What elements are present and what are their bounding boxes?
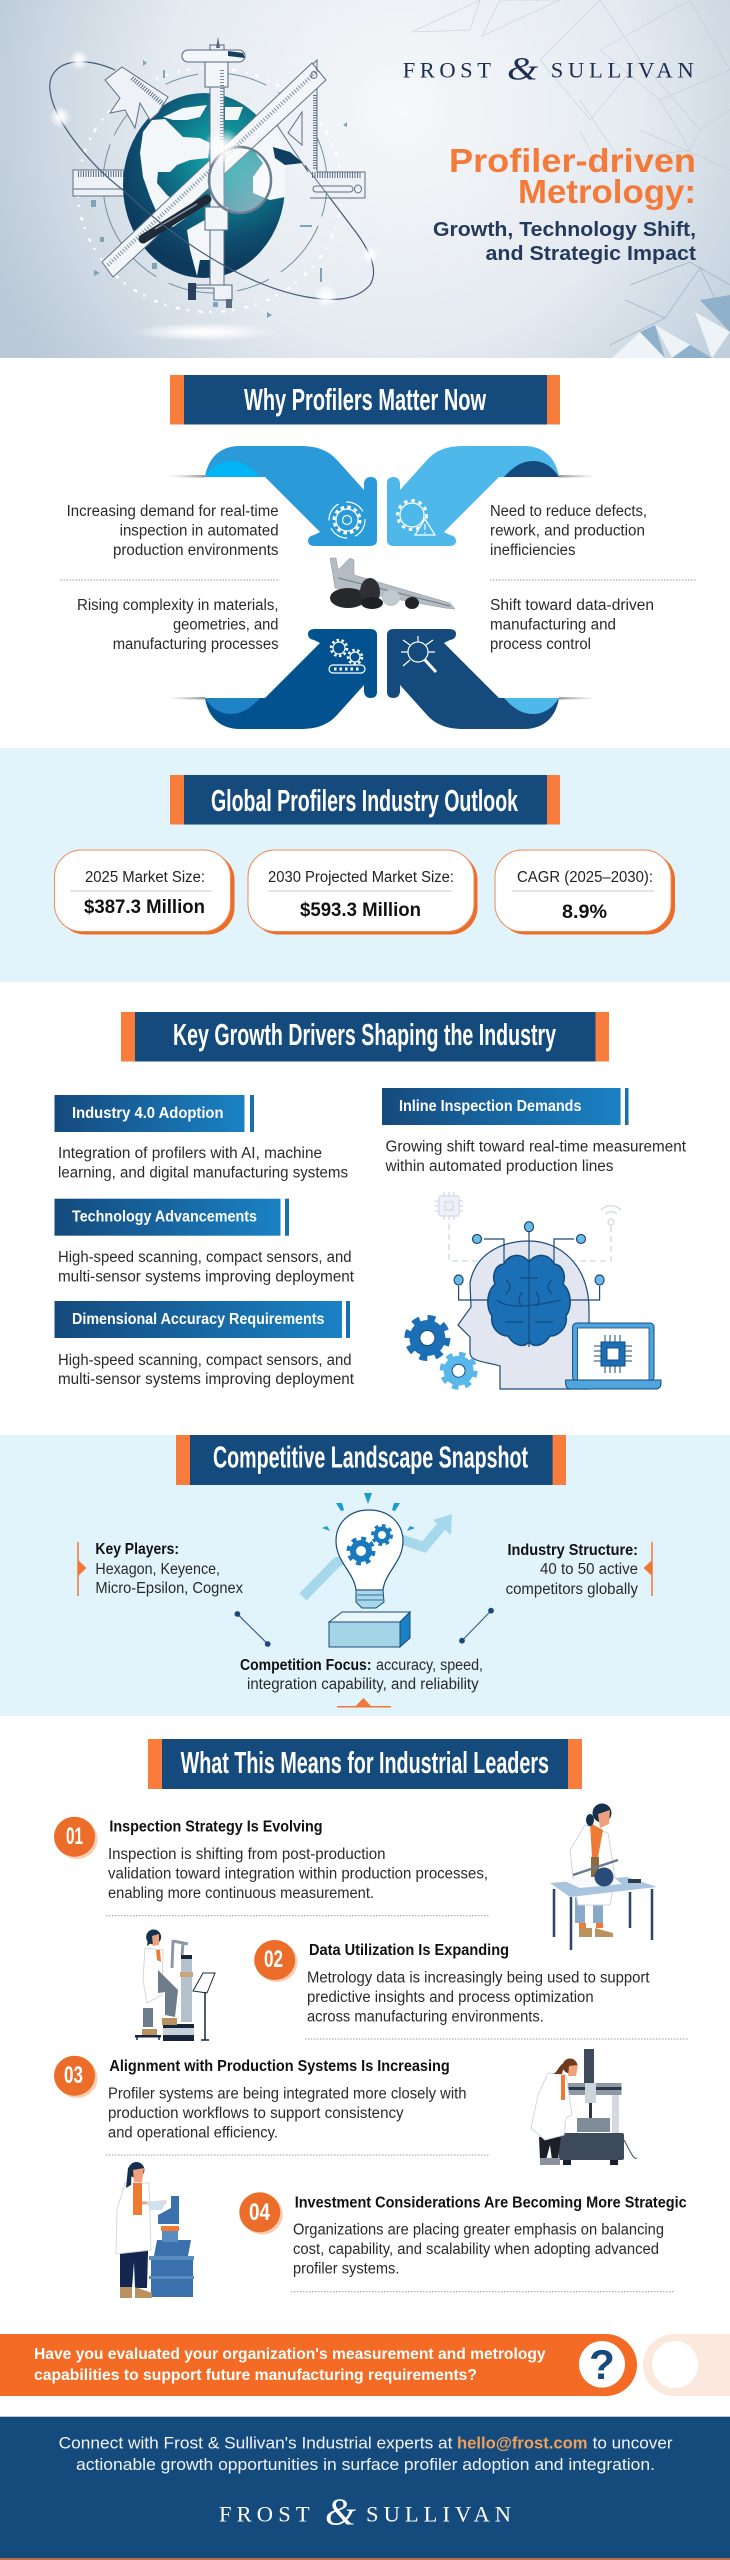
driver: industry 4.0 adoption: Industry 4.0 Adoption (72, 1105, 224, 1122)
callout: key players (78, 1541, 243, 1597)
illustration: engineer at table (550, 1804, 657, 1950)
question text (34, 2346, 546, 2384)
footer accent (0, 2558, 730, 2560)
card: 2025 market size: 2025 Market Size: (85, 869, 205, 886)
ribbon arrow: bottom right (387, 629, 559, 729)
item 02: across manufacturing environments. (307, 2009, 544, 2026)
icon: network magnifier (401, 636, 436, 672)
item 04: 04 (249, 2199, 271, 2226)
driver: inline inspection demands: Growing shift toward real-time measurement (386, 1139, 687, 1156)
ribbon arrow: top left (205, 446, 377, 546)
item 02 (254, 1940, 688, 2039)
item 01: Inspection is shifting from post-production (108, 1846, 386, 1863)
driver: inline inspection demands: within automated production lines (385, 1158, 614, 1175)
item 03: production workflows to support consistency (108, 2105, 404, 2122)
ribbon shadows (168, 475, 596, 700)
left text blocks: Increasing demand for real-time (67, 503, 279, 520)
driver: dimensional accuracy requirements: Dimensional Accuracy Requirements (72, 1311, 324, 1328)
panel: competitive landscape snapshot (0, 1435, 730, 1716)
light regions of the map (140, 105, 285, 276)
ribbon arrow: top right (387, 446, 559, 546)
footer logo: SULLIVAN (366, 2502, 511, 2527)
heading (121, 1012, 609, 1062)
dark islands (273, 147, 303, 165)
contact text (59, 2434, 673, 2474)
panel: key growth drivers (54, 1012, 687, 1389)
driver: technology advancements: High-speed scanning, compact sensors, and (58, 1249, 352, 1266)
card: CAGR: 8.9% (562, 902, 607, 923)
illustration: engineer with coordinate measuring machine (531, 2049, 637, 2165)
left text blocks: Rising complexity in materials, (77, 597, 278, 614)
driver: industry 4.0 adoption: Integration of profilers with AI, machine (58, 1145, 322, 1162)
question text: capabilities to support future manufacturing requirements? (34, 2367, 477, 2384)
particles (91, 60, 347, 318)
illustration: engineer with column gauge (135, 1930, 215, 2041)
title: Metrology: (518, 174, 696, 211)
driver: inline inspection demands: Inline Inspection Demands (399, 1098, 582, 1115)
item 01: enabling more continuous measurement. (108, 1885, 374, 1902)
driver: technology advancements (54, 1199, 355, 1286)
panel: what this means for industrial leaders (54, 1739, 688, 2298)
card: 2030 projected market size: 2030 Projected Market Size: (268, 869, 454, 886)
heading (170, 775, 560, 824)
vertical caliper (182, 37, 245, 308)
title: and Strategic Impact (486, 242, 696, 265)
rays (322, 1493, 415, 1531)
right text blocks: rework, and production (490, 523, 645, 540)
icon: rotating gear (329, 502, 365, 538)
connector lines (235, 1608, 493, 1646)
ribbon arrow: bottom left (205, 629, 377, 729)
card: CAGR (495, 850, 675, 934)
item 03: and operational efficiency. (108, 2124, 278, 2141)
right text blocks: inefficiencies (490, 542, 576, 559)
item 04: Organizations are placing greater emphasis on balancing (293, 2221, 664, 2238)
callout: industry structure (506, 1542, 652, 1598)
item 03 (54, 2056, 489, 2155)
icon: gear with warning (398, 500, 435, 535)
left text blocks: inspection in automated (120, 523, 279, 540)
contact text: to uncover (593, 2434, 673, 2452)
question text: Have you evaluated your organization's measurement and metrology (34, 2346, 546, 2363)
logo: FROST (403, 57, 491, 82)
illustration: globe with metrology tools (49, 37, 379, 318)
connectors (459, 1227, 600, 1347)
contact text: Connect with Frost & Sullivan's Industrial experts at (59, 2434, 453, 2452)
upper-left caliper (105, 67, 168, 128)
right text blocks: process control (490, 636, 591, 653)
item 01: Inspection Strategy Is Evolving (109, 1819, 323, 1836)
right text blocks: manufacturing and (490, 617, 616, 634)
brain (488, 1255, 570, 1345)
panel: why profilers matter now (60, 375, 696, 729)
driver: technology advancements: multi-sensor systems improving deployment (58, 1269, 355, 1286)
decorative pale pill (643, 2334, 730, 2396)
low-poly crystals bottom right (610, 262, 730, 358)
item 01 (54, 1817, 489, 1916)
faint chip and wifi with dashed links (435, 1192, 621, 1261)
section background (0, 1435, 730, 1716)
callout: industry structure: competitors globally (506, 1581, 638, 1598)
illustration: engineer with blue machine (116, 2162, 194, 2298)
orange question bar (0, 2334, 637, 2396)
head (458, 1241, 589, 1389)
logo (403, 52, 694, 88)
speckle ring (78, 68, 342, 312)
illustration: lightbulb with gears on block (303, 1493, 452, 1647)
right text blocks: Need to reduce defects, (490, 503, 647, 520)
callout: key players: Micro-Epsilon, Cognex (95, 1580, 243, 1597)
driver: dimensional accuracy requirements: High-speed scanning, compact sensors, and (58, 1352, 352, 1369)
magnifier (143, 147, 271, 239)
left ruler (73, 170, 133, 196)
item 01: validation toward integration within production processes, (108, 1866, 488, 1883)
logo: SULLIVAN (551, 57, 694, 82)
sparkles (203, 128, 243, 168)
heading (148, 1739, 582, 1789)
left text blocks: geometries, and (173, 617, 278, 634)
block (329, 1612, 410, 1622)
driver: inline inspection demands (382, 1088, 687, 1175)
icon: question mark (579, 2341, 625, 2388)
heading (170, 375, 560, 424)
item 04: profiler systems. (293, 2260, 399, 2277)
left text blocks: production environments (113, 542, 279, 559)
nodes (454, 1222, 604, 1285)
hero panel (0, 0, 730, 358)
callout: competition focus (240, 1657, 483, 1707)
title: Profiler-driven (449, 143, 696, 180)
driver: technology advancements: Technology Advancements (72, 1209, 257, 1226)
footer logo (219, 2492, 511, 2534)
laptop (566, 1323, 661, 1389)
low-poly network top right (412, 0, 730, 170)
driver: industry 4.0 adoption: learning, and digital manufacturing systems (58, 1165, 348, 1182)
callout: competition focus: Competition Focus: (240, 1657, 372, 1674)
item 02: Metrology data is increasingly being used to support (307, 1969, 650, 1986)
icon: gears on conveyor (329, 640, 365, 673)
growth arrow (303, 1522, 445, 1597)
card: CAGR: CAGR (2025–2030): (517, 869, 653, 886)
card: 2025 market size (54, 850, 234, 934)
item 01: 01 (66, 1823, 83, 1850)
callout: key players: Hexagon, Keyence, (95, 1561, 220, 1578)
item 02: Data Utilization Is Expanding (309, 1942, 509, 1959)
image: caliper with bolts (330, 558, 455, 609)
panel: global profilers industry outlook (0, 748, 730, 982)
title (433, 143, 696, 265)
heading (176, 1435, 566, 1485)
footer (0, 2417, 730, 2560)
item 03: Alignment with Production Systems Is Increasing (109, 2058, 450, 2075)
pale pill circle (652, 2341, 698, 2388)
gear: large (407, 1318, 447, 1358)
item 04: Investment Considerations Are Becoming More Strategic (295, 2194, 687, 2211)
contact text: actionable growth opportunities in surface profiler adoption and integration. (76, 2456, 655, 2474)
orbit ring (50, 62, 374, 299)
bulb (336, 1510, 403, 1590)
left text blocks: manufacturing processes (113, 636, 279, 653)
footer band (0, 2417, 730, 2558)
dial ring (103, 73, 327, 293)
callout: competition focus: integration capability, and reliability (247, 1676, 479, 1693)
bulb gears (349, 1526, 391, 1563)
driver: dimensional accuracy requirements: multi-sensor systems improving deployment (58, 1371, 355, 1388)
heading: Global Profilers Industry Outlook (211, 783, 518, 818)
left text blocks (60, 503, 280, 653)
footer logo: & (325, 2492, 356, 2534)
card: 2030 projected market size: $593.3 Million (300, 900, 421, 921)
driver: industry 4.0 adoption (54, 1095, 348, 1182)
hero background (0, 0, 730, 358)
callout: competition focus: accuracy, speed, (376, 1657, 483, 1674)
callout: key players: Key Players: (95, 1541, 179, 1558)
logo: & (507, 52, 538, 88)
illustration: AI head with brain, gears and laptop (407, 1192, 661, 1389)
item 04: cost, capability, and scalability when adopting advanced (293, 2241, 659, 2258)
right text blocks (490, 503, 696, 653)
diagonal ruler (102, 63, 326, 277)
heading: Why Profilers Matter Now (244, 382, 487, 417)
gear: small (442, 1354, 475, 1387)
ground glow (130, 323, 280, 341)
item 03: Profiler systems are being integrated more closely with (108, 2085, 466, 2102)
globe (123, 93, 285, 278)
icon: question mark: ? (589, 2341, 615, 2388)
call to action banner (0, 2334, 730, 2396)
driver: dimensional accuracy requirements (54, 1301, 355, 1388)
triangle square ruler (267, 60, 365, 198)
right text blocks: Shift toward data-driven (490, 597, 654, 614)
footer logo: FROST (219, 2502, 310, 2527)
card: 2030 projected market size (248, 850, 478, 934)
callout: industry structure: Industry Structure: (508, 1542, 638, 1559)
item 03: 03 (64, 2062, 83, 2089)
callout: industry structure: 40 to 50 active (540, 1561, 638, 1578)
contact text: hello@frost.com (457, 2434, 588, 2452)
section background (0, 748, 730, 982)
item 04 (239, 2192, 687, 2292)
item 02: predictive insights and process optimization (307, 1989, 594, 2006)
card: 2025 market size: $387.3 Million (84, 897, 205, 918)
heading: Competitive Landscape Snapshot (213, 1440, 528, 1475)
item 02: 02 (264, 1946, 283, 1973)
title: Growth, Technology Shift, (433, 218, 696, 241)
